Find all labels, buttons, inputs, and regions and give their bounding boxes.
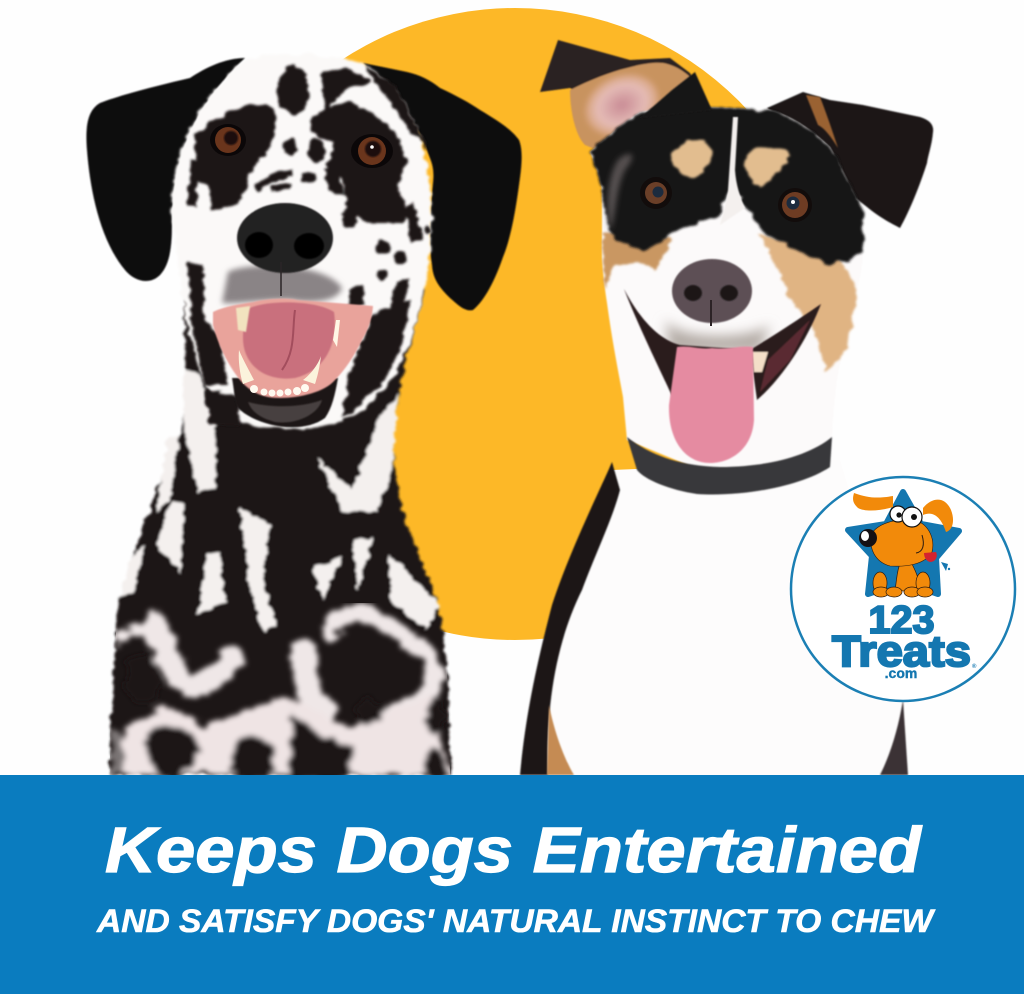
dog body dark edge [520,462,620,775]
dalmatian dog [86,54,522,780]
dog tan cheek left [603,232,672,290]
dog white blaze [720,117,745,225]
dog body [520,460,905,775]
dog right ear tan strip [806,95,838,148]
dalmatian eyes [210,124,393,168]
dog tongue [669,347,754,463]
dog tan cheek right [758,232,857,372]
dog eyes [640,177,812,222]
dog head [590,107,863,470]
dalmatian left ear [86,58,245,281]
dog black mask [590,107,863,264]
dog collar [627,437,832,495]
blue banner [0,775,1024,994]
banner headline: Keeps Dogs Entertained [105,814,923,886]
dalmatian nose [237,203,333,296]
dog left ear [540,40,712,150]
logo wordmark 123: 123 [868,599,934,642]
dog eyebrows [670,140,790,188]
dalmatian chest markings [110,612,450,780]
logo circle [791,477,1015,701]
mixed breed dog [520,40,933,775]
logo badge [791,477,1015,701]
dog right ear [767,92,933,228]
banner subheading: AND SATISFY DOGS' NATURAL INSTINCT TO CHEW [96,903,936,939]
dalmatian head [172,54,432,429]
logo star [848,492,959,594]
yellow background circle [199,8,831,640]
dalmatian open mouth [213,299,373,398]
dalmatian body [110,290,450,775]
dalmatian right ear [363,63,522,310]
dog ear base shadow [640,72,712,118]
dog grey eye marking [608,154,632,230]
dalmatian lower jaw [232,378,338,427]
dog lower right dark edge [880,700,908,775]
dog chest tan patch [547,705,574,775]
logo registered mark: ® [972,663,977,670]
dalmatian muzzle grey [222,266,342,303]
dog muzzle shadow [665,320,770,352]
dog mouth [624,289,821,400]
logo wordmark .com: .com [885,665,917,681]
logo wordmark Treats: Treats [832,627,971,676]
dog nose [672,259,752,326]
logo dog mascot [853,493,953,597]
dalmatian face markings [187,66,431,425]
